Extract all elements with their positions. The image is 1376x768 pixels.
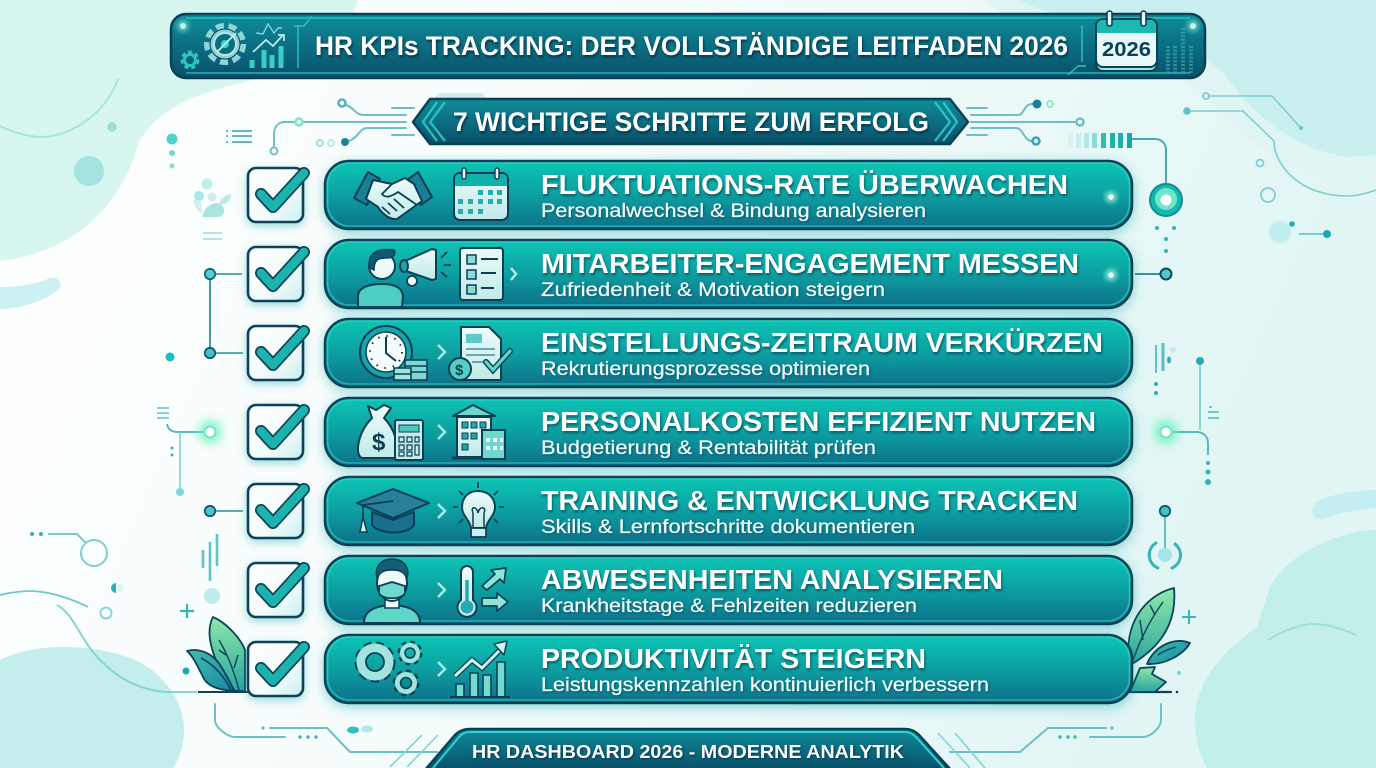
icon: checklist	[460, 248, 503, 300]
subtext 6: Krankheitstage & Fehlzeiten reduzieren	[541, 595, 917, 617]
icon: person with megaphone	[358, 249, 451, 307]
icon: calendar	[454, 168, 508, 220]
icon: signal dots	[1168, 28, 1191, 73]
icon: calendar 2026: 2026	[1102, 39, 1151, 61]
circuit decoration: left top	[166, 100, 414, 168]
subtext 5: Skills & Lernfortschritte dokumentieren	[541, 516, 915, 538]
heading 2: MITARBEITER-ENGAGEMENT MESSEN	[541, 248, 1079, 279]
icon: gears	[358, 643, 420, 694]
step 4	[325, 398, 1132, 466]
title text: HR KPIs TRACKING: DER VOLLSTÄNDIGE LEITFADEN 2026	[315, 31, 1068, 61]
chevron	[438, 504, 445, 518]
connector: checkbox 5	[205, 506, 243, 516]
decoration: left middle	[157, 352, 222, 496]
icon: clock and coins	[360, 326, 427, 380]
footer text: HR DASHBOARD 2026 - MODERNE ANALYTIK	[472, 741, 905, 762]
icon: person with mask	[364, 559, 420, 623]
icon: title chart	[252, 24, 284, 68]
subtext 7: Leistungskennzahlen kontinuierlich verbessern	[541, 674, 989, 696]
checkbox 2	[248, 247, 304, 301]
icon: title gears	[183, 26, 243, 67]
icon: calendar 2026	[1096, 11, 1157, 71]
icon: light bulb	[453, 482, 504, 537]
chevron	[438, 345, 445, 359]
icon: document with coin	[449, 327, 510, 380]
chevron	[438, 425, 445, 439]
leaves: right	[1128, 588, 1190, 693]
icon: growth chart	[450, 641, 510, 697]
subtext 2: Zufriedenheit & Motivation steigern	[541, 279, 885, 301]
icon: money bag and calculator: $	[372, 429, 386, 456]
bottom bracket: right	[938, 704, 1161, 768]
step 6	[325, 556, 1132, 624]
title banner	[171, 11, 1205, 78]
icon: handshake	[354, 172, 432, 219]
step 5	[325, 477, 1132, 545]
heading 6: ABWESENHEITEN ANALYSIEREN	[541, 564, 1003, 595]
checkbox 5	[248, 484, 304, 538]
checkbox 4	[248, 405, 304, 459]
bottom bracket: left	[215, 704, 438, 767]
heading 3: EINSTELLUNGS-ZEITRAUM VERKÜRZEN	[541, 327, 1103, 358]
icon: trend arrows	[482, 568, 508, 611]
icon: money bag and calculator	[358, 405, 423, 460]
heading 7: PRODUKTIVITÄT STEIGERN	[541, 643, 926, 674]
checkbox 6	[248, 563, 304, 617]
icon: thermometer	[458, 566, 477, 617]
step 7	[325, 635, 1132, 703]
subtext 1: Personalwechsel & Bindung analysieren	[541, 200, 926, 222]
icon: people and leaf	[193, 178, 231, 239]
step 1	[325, 161, 1132, 229]
icon: graduation cap	[357, 489, 429, 532]
subtitle banner	[413, 93, 968, 144]
step 2	[325, 240, 1132, 308]
connector: checkboxes 2 and 3	[205, 269, 243, 358]
step 3	[325, 319, 1132, 387]
checkbox 7	[248, 642, 304, 696]
circuit decoration: right top	[967, 100, 1084, 144]
checkbox 1	[248, 168, 304, 222]
heading 5: TRAINING & ENTWICKLUNG TRACKEN	[541, 485, 1078, 516]
leaves: left	[187, 617, 250, 692]
footer banner	[425, 729, 951, 768]
chevron	[511, 268, 516, 280]
heading 4: PERSONALKOSTEN EFFIZIENT NUTZEN	[541, 406, 1096, 437]
chevron	[438, 662, 445, 676]
subtitle text: 7 WICHTIGE SCHRITTE ZUM ERFOLG	[453, 107, 929, 137]
chevron	[438, 583, 445, 597]
subtext 4: Budgetierung & Rentabilität prüfen	[541, 437, 876, 459]
subtext 3: Rekrutierungsprozesse optimieren	[541, 358, 870, 380]
heading 1: FLUKTUATIONS-RATE ÜBERWACHEN	[541, 169, 1068, 200]
icon: document with coin: $	[455, 362, 464, 379]
connector: row 2 right node	[1135, 268, 1172, 280]
status bars and glowing orb	[1068, 133, 1182, 253]
circuit decoration: far right	[1183, 93, 1376, 243]
decoration: right middle	[1149, 343, 1219, 675]
icon: office building	[452, 405, 505, 459]
checkbox 3	[248, 326, 304, 380]
decoration: left lower	[0, 532, 220, 692]
